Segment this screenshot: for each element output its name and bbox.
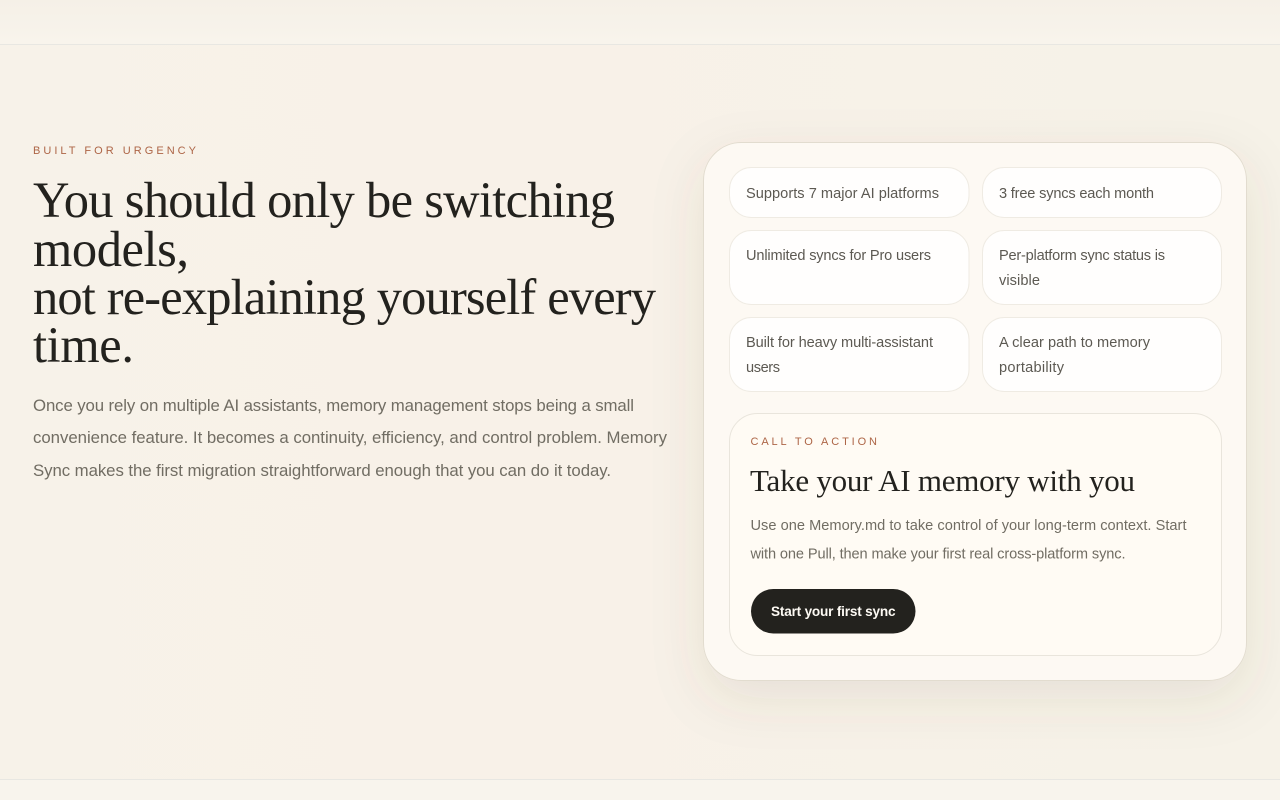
feature: supports 7 platforms (730, 168, 969, 218)
feature: free syncs: 3 free syncs each month (999, 186, 1154, 202)
body paragraph (33, 396, 668, 480)
feature: memory portability (982, 318, 1222, 392)
eyebrow: call to action: CALL TO ACTION (750, 436, 877, 448)
feature: unlimited syncs (730, 230, 969, 304)
top navigation strip (0, 0, 1280, 44)
feature: unlimited syncs: Unlimited syncs for Pro users (746, 248, 931, 264)
feature: supports 7 platforms: Supports 7 major AI platforms (746, 186, 939, 202)
heading: You should only be switching (33, 172, 615, 228)
eyebrow: built for urgency: BUILT FOR URGENCY (33, 145, 197, 157)
feature: memory portability: portability (999, 360, 1065, 376)
body paragraph: convenience feature. It becomes a continuity, efficiency, and control problem. Memory (33, 428, 668, 447)
feature: multi-assistant users (730, 318, 969, 392)
call to action background (730, 414, 1222, 656)
call to action paragraph: Use one Memory.md to take control of your long-term context. Start (750, 518, 1186, 534)
feature: sync status: visible (999, 273, 1040, 289)
call to action paragraph: with one Pull, then make your first real cross-platform sync. (750, 546, 1126, 562)
card background (704, 142, 1246, 680)
feature: sync status (982, 230, 1222, 304)
panel: call to action (730, 414, 1222, 656)
call to action heading: Take your AI memory with you (750, 463, 1135, 498)
panel: feature and call-to-action card (704, 142, 1246, 680)
feature: multi-assistant users: users (746, 360, 780, 376)
heading: time. (33, 317, 134, 373)
feature: multi-assistant users: Built for heavy multi-assistant (746, 335, 933, 351)
feature: free syncs (982, 168, 1222, 218)
heading (33, 172, 657, 373)
body paragraph: Sync makes the first migration straightforward enough that you can do it today. (33, 461, 611, 480)
body paragraph: Once you rely on multiple AI assistants, memory management stops being a small (33, 396, 634, 415)
feature: sync status: Per-platform sync status is (999, 248, 1165, 264)
heading: models, (33, 221, 189, 277)
button: start your first sync: Start your first sync (771, 604, 896, 619)
button: start your first sync (751, 589, 916, 634)
feature: memory portability: A clear path to memory (999, 335, 1151, 351)
panel: intro copy (33, 145, 668, 480)
call to action paragraph (750, 518, 1186, 562)
heading: not re-explaining yourself every (33, 269, 657, 325)
footer strip (0, 780, 1280, 800)
